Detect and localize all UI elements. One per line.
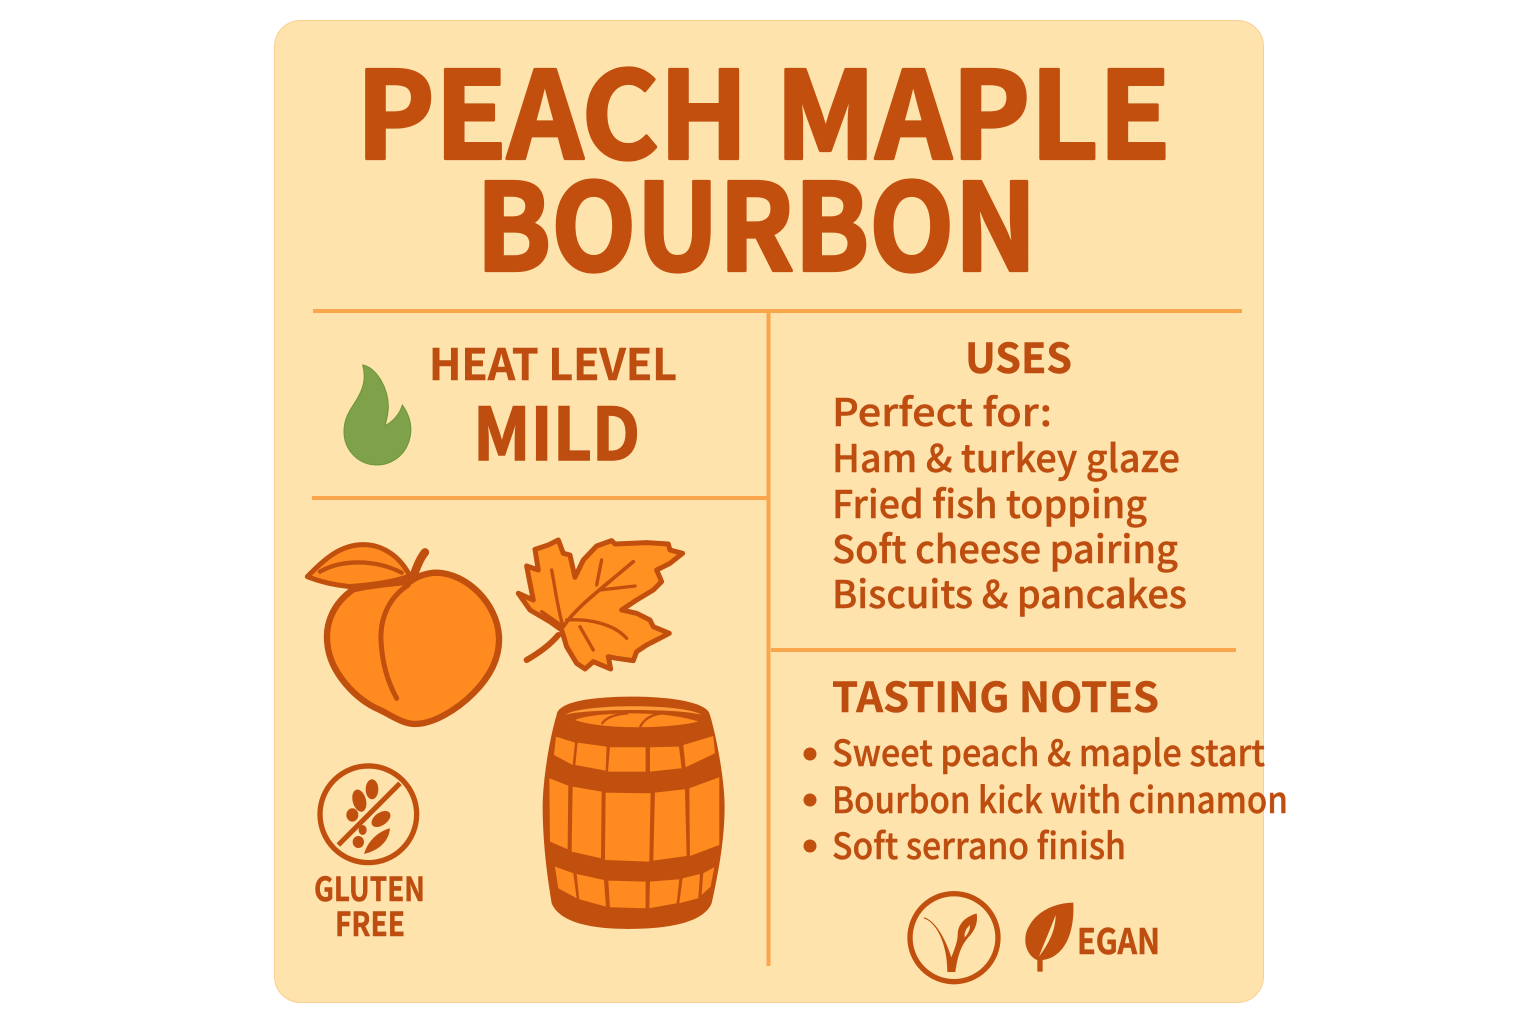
uses list: Perfect for: — [832, 382, 1052, 437]
heading: uses: USES — [965, 325, 1072, 385]
tasting notes list: Soft serrano finish — [832, 818, 1126, 870]
panel: label card background — [274, 20, 1264, 1002]
tasting notes list: Sweet peach & maple start — [832, 725, 1265, 777]
icon: bourbon barrel — [543, 697, 725, 929]
uses list: Fried fish topping — [832, 474, 1147, 529]
title: BOURBON — [476, 132, 1037, 306]
icon: green flame — [344, 365, 411, 465]
panel: tasting notes — [804, 664, 1288, 870]
label: gluten free: FREE — [335, 898, 405, 946]
uses list — [832, 382, 1187, 619]
panel: vegan badge — [910, 894, 1160, 982]
tasting notes list — [804, 725, 1288, 870]
heat value: mild: MILD — [473, 376, 640, 481]
panel: uses — [832, 325, 1187, 619]
icon: maple leaf — [518, 540, 683, 669]
label: gluten free: GLUTEN — [314, 863, 425, 911]
title: PEACH MAPLE — [356, 20, 1171, 194]
label: gluten free — [314, 863, 425, 946]
heading: heat level: HEAT LEVEL — [429, 331, 677, 393]
label: vegan: EGAN — [1077, 914, 1160, 965]
panel: heat level — [344, 331, 677, 481]
uses list: Biscuits & pancakes — [832, 564, 1187, 619]
tasting notes list: Bourbon kick with cinnamon — [832, 772, 1288, 824]
uses list: Soft cheese pairing — [832, 519, 1178, 574]
icon: peach — [307, 545, 499, 724]
title — [356, 20, 1171, 306]
icon: vegan circle — [910, 894, 998, 982]
panel: ingredient illustrations — [307, 540, 725, 929]
icon: gluten free badge — [320, 766, 417, 863]
heading: tasting notes: TASTING NOTES — [832, 664, 1159, 724]
uses list: Ham & turkey glaze — [832, 428, 1180, 483]
icon: leaf — [1025, 903, 1073, 972]
